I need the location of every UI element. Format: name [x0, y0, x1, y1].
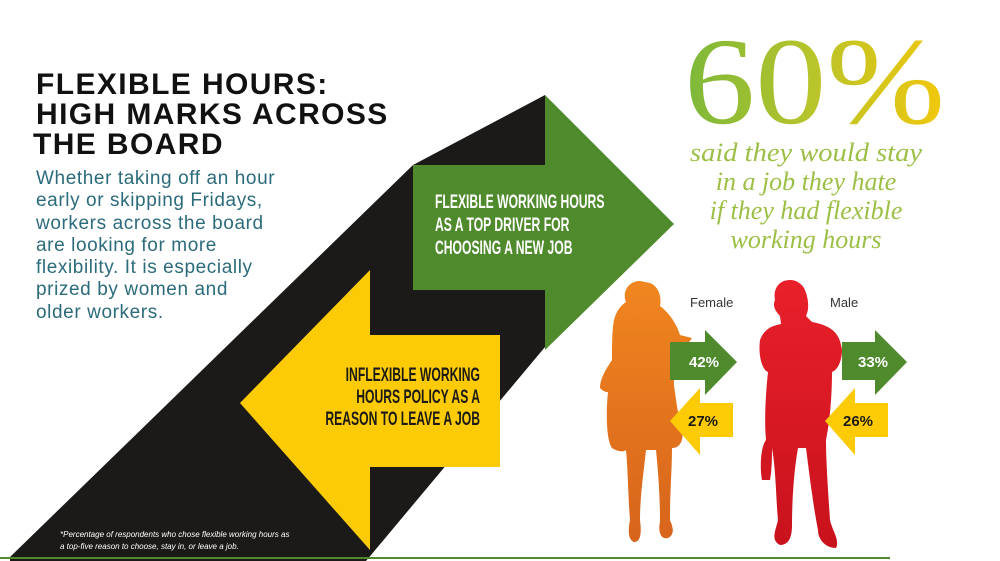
- title: THE BOARD: [33, 128, 224, 161]
- male yellow arrow 26%: 26%: [843, 413, 873, 430]
- female yellow arrow 27%: [670, 388, 733, 455]
- stat caption: in a job they hate: [716, 167, 896, 196]
- intro text: [36, 168, 275, 323]
- gender labels: Male: [830, 295, 858, 310]
- intro text: flexibility. It is especially: [36, 257, 253, 278]
- big stat 60%: 60%: [684, 13, 945, 150]
- green arrow: choosing a new job: [413, 95, 674, 350]
- green arrow: choosing a new job: CHOOSING A NEW JOB: [435, 239, 572, 259]
- stat caption: working hours: [731, 225, 881, 254]
- male green arrow 33%: 33%: [858, 354, 888, 371]
- title: [33, 68, 389, 161]
- bottom green line: [0, 557, 890, 559]
- intro text: Whether taking off an hour: [36, 168, 275, 189]
- yellow arrow: leaving a job: [240, 270, 500, 550]
- stat caption: [690, 138, 923, 254]
- intro text: early or skipping Fridays,: [36, 190, 263, 211]
- female yellow arrow 27%: 27%: [688, 413, 718, 430]
- title: FLEXIBLE HOURS:: [36, 68, 329, 101]
- intro text: are looking for more: [36, 235, 217, 256]
- footnote: *Percentage of respondents who chose flexible working hours as: [60, 530, 289, 539]
- male yellow arrow 26%: [825, 388, 888, 455]
- intro text: workers across the board: [36, 213, 264, 234]
- female silhouette: [600, 281, 692, 542]
- gender labels: Female: [690, 295, 733, 310]
- stat caption: if they had flexible: [710, 196, 902, 225]
- male silhouette: [759, 280, 842, 548]
- footnote: a top-five reason to choose, stay in, or leave a job.: [60, 542, 239, 551]
- female green arrow 42%: [670, 330, 737, 395]
- yellow arrow: leaving a job: INFLEXIBLE WORKING: [346, 366, 480, 386]
- stat caption: said they would stay: [690, 138, 923, 167]
- yellow arrow: leaving a job: REASON TO LEAVE A JOB: [325, 410, 480, 430]
- black diagonal band: [10, 95, 545, 561]
- intro text: older workers.: [36, 302, 164, 323]
- title: HIGH MARKS ACROSS: [36, 98, 389, 131]
- gender labels: [690, 295, 858, 310]
- green arrow: choosing a new job: AS A TOP DRIVER FOR: [435, 216, 570, 236]
- footnote: [60, 530, 289, 551]
- male green arrow 33%: [842, 330, 907, 395]
- female green arrow 42%: 42%: [689, 354, 719, 371]
- green arrow: choosing a new job: FLEXIBLE WORKING HOURS: [435, 193, 604, 213]
- intro text: prized by women and: [36, 279, 228, 300]
- yellow arrow: leaving a job: HOURS POLICY AS A: [356, 388, 480, 408]
